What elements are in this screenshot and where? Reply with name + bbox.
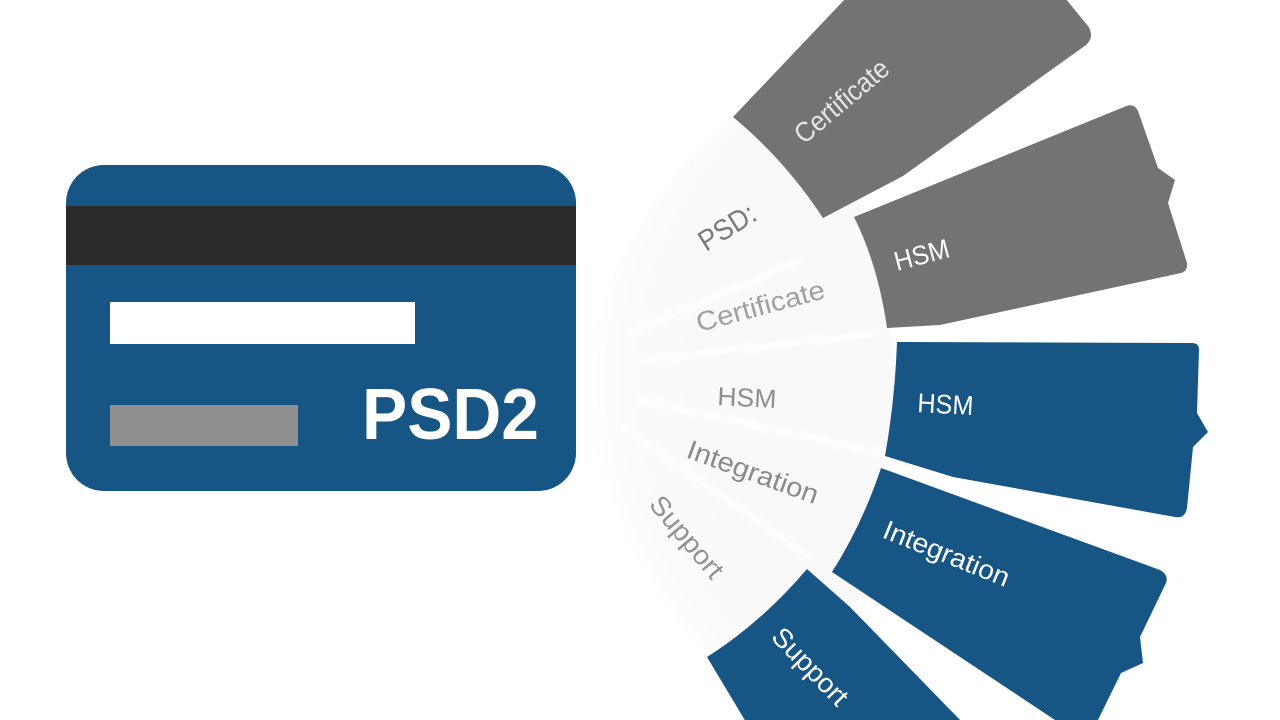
panel: light fan background [588, 117, 900, 657]
label: HSM fan text: HSM [717, 381, 777, 414]
tab: blue Integration [832, 468, 1167, 720]
tab: grey HSM [854, 105, 1187, 328]
grey card bar [110, 405, 298, 446]
white card bar [110, 302, 415, 344]
card label PSD2: PSD2 [362, 375, 539, 455]
magnetic stripe [66, 206, 576, 265]
label: Integration fan text: Integration [683, 434, 823, 510]
tab: blue HSM [885, 342, 1208, 517]
tab: grey Certificate [733, 0, 1091, 218]
tab: blue HSM: HSM [917, 388, 974, 421]
tab: blue Integration: Integration [879, 515, 1014, 593]
tab: blue Support: Support [766, 621, 855, 712]
panel: payment card [66, 165, 576, 491]
tab: grey Certificate: Certificate [788, 53, 895, 150]
tab: grey HSM: HSM [891, 233, 953, 277]
tab: blue Support [707, 569, 962, 720]
label: Support fan text: Support [643, 490, 730, 585]
label: Certificate fan text: Certificate [693, 275, 828, 338]
label: PSD2 fan text: PSD: [693, 198, 762, 258]
